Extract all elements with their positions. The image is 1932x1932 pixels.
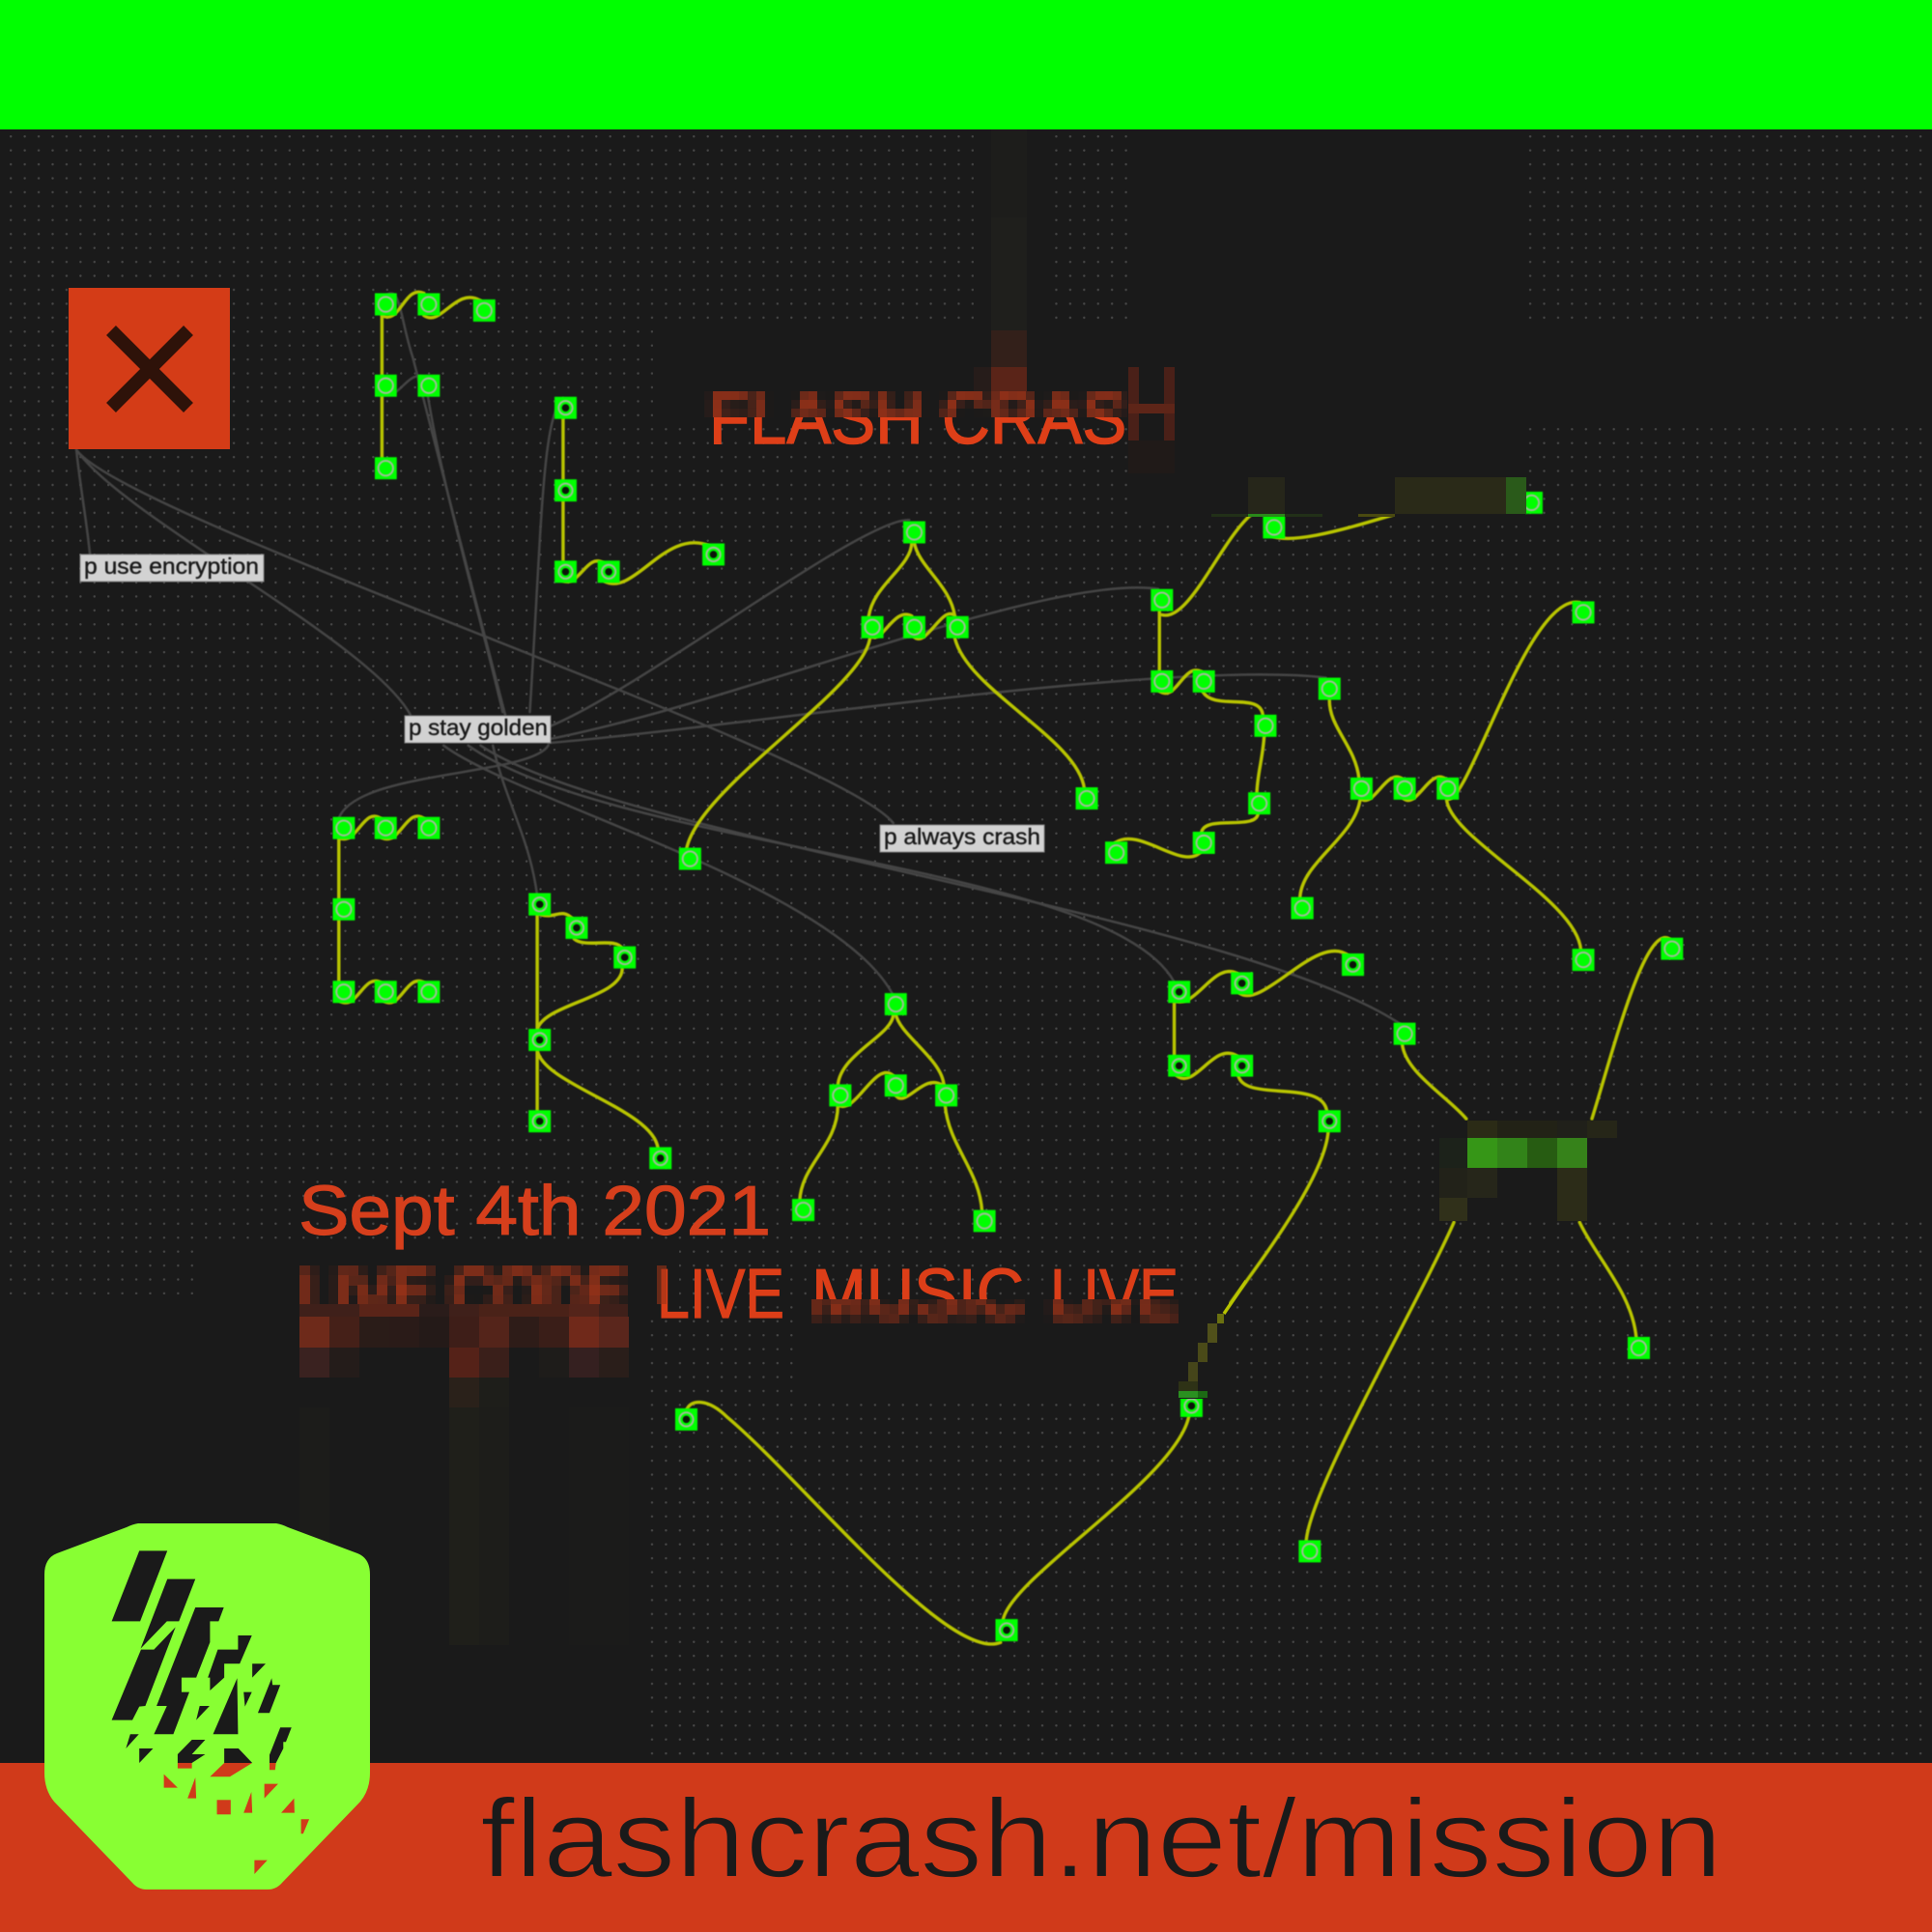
glitch: green pixel block right (1439, 1121, 1617, 1221)
glitch: pixelated wire above lower node (1179, 1281, 1246, 1398)
icon: red X block (69, 288, 230, 449)
label: p stay golden: p stay golden (409, 715, 548, 740)
headline: LIVE CODE LIVE MUSIC LIVE: LIVE CODE (299, 1256, 628, 1333)
headline: LIVE CODE LIVE MUSIC LIVE: LIVE (1050, 1256, 1179, 1333)
nodes: all green toggle objects (332, 294, 1683, 1641)
headline: LIVE CODE LIVE MUSIC LIVE: MUSIC (811, 1256, 1024, 1333)
label: p use encryption: p use encryption (84, 554, 259, 579)
glitch: pixel blocks upper right (991, 129, 1526, 517)
label: p always crash: p always crash (884, 824, 1040, 849)
top green band (0, 0, 1932, 129)
headline: LIVE CODE LIVE MUSIC LIVE (299, 1265, 1179, 1323)
bottom red band (0, 1763, 1932, 1932)
glitch: pixel mosaic under LIVE CODE (299, 1304, 629, 1645)
title: FLASH CRASH (704, 330, 1175, 444)
headline: LIVE CODE LIVE MUSIC LIVE: LIVE (1050, 1256, 1179, 1333)
patch cords: yellow wires (339, 292, 1669, 1644)
title: FLASH CRASH: FLASH CRASH (709, 378, 1175, 460)
headline: LIVE CODE LIVE MUSIC LIVE: LIVE (657, 1256, 784, 1333)
patch cords: grey wires (76, 294, 1403, 1025)
title: FLASH CRASH: FLASH CRASH (709, 378, 1175, 460)
date: Sept 4th 2021: Sept 4th 2021 (298, 1173, 771, 1250)
headline: LIVE CODE LIVE MUSIC LIVE: MUSIC (811, 1256, 1024, 1333)
logo: green shield with lightning shards (44, 1523, 370, 1889)
URL: flashcrash.net/mission: flashcrash.net/mission (480, 1776, 1722, 1901)
